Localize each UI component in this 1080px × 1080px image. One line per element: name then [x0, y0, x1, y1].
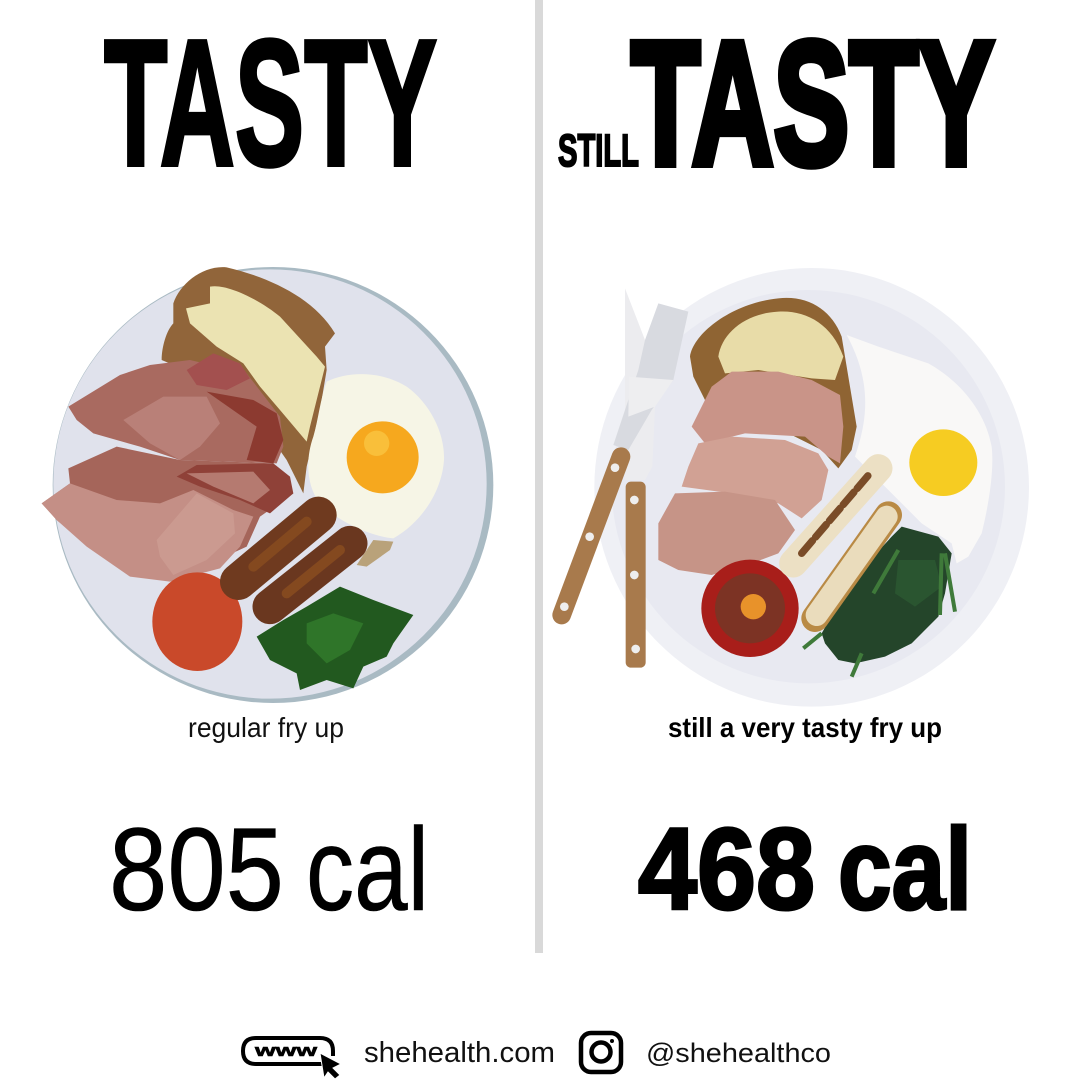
fried egg — [847, 335, 992, 563]
regular fry up plate illustration — [42, 267, 493, 703]
fried egg — [308, 374, 444, 567]
icon: instagram — [581, 1033, 621, 1072]
sausages — [793, 468, 888, 618]
calorie value: 468 cal — [638, 804, 972, 934]
calorie value: 805 cal: cal — [306, 804, 429, 936]
heading: STILL TASTY — [558, 6, 994, 202]
bacon — [42, 353, 293, 582]
caption: regular fry up: regular fry up — [188, 712, 344, 743]
calorie value: 805 cal — [109, 804, 429, 936]
calorie value: 468 cal: 468 — [638, 804, 815, 934]
center divider — [535, 0, 543, 953]
toast — [690, 298, 857, 468]
spinach — [257, 587, 413, 690]
plate — [53, 267, 493, 703]
back bacon — [658, 372, 843, 575]
footer website: shehealth.com — [364, 1037, 555, 1069]
icon: website cursor: www — [253, 1041, 318, 1060]
caption: still a very tasty fry up: still a very tasty fry up — [668, 712, 942, 743]
heading: TASTY: TASTY — [104, 3, 437, 204]
footer handle: @shehealthco — [646, 1038, 831, 1068]
calorie value: 805 cal: 805 — [109, 804, 284, 936]
tomato — [152, 572, 242, 671]
toast — [162, 267, 335, 493]
spinach — [803, 527, 955, 677]
tomato — [701, 560, 799, 657]
heading: STILL TASTY: STILL — [558, 125, 639, 176]
icon: website cursor — [243, 1038, 341, 1079]
sausages — [238, 515, 350, 607]
calorie value: 468 cal: cal — [838, 804, 972, 934]
knife and fork — [560, 288, 688, 668]
plate — [594, 268, 1029, 707]
still a very tasty fry up plate illustration — [560, 268, 1029, 707]
